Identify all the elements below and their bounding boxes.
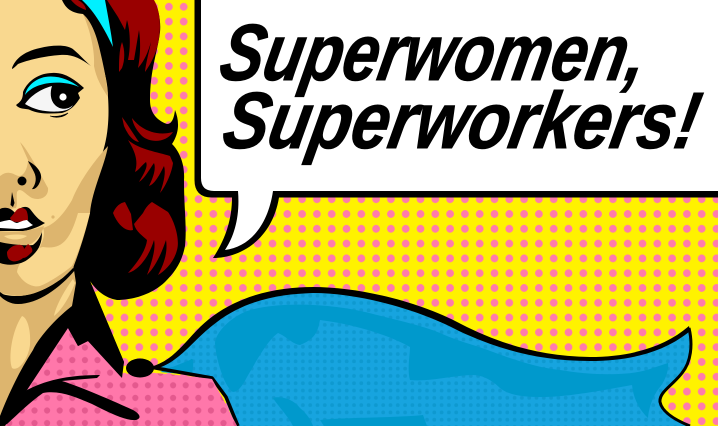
mouth: [0, 207, 45, 265]
collar point: [68, 281, 124, 378]
neck highlights: [10, 279, 75, 369]
beauty mark: [51, 215, 55, 219]
cape knot: [126, 358, 154, 378]
hair and body silhouette: [0, 0, 186, 426]
cape outline: [150, 287, 691, 426]
neck: [0, 270, 76, 416]
nose shadow: [0, 142, 48, 210]
nostril: [10, 161, 41, 207]
eyelid: cyan shadow: [25, 77, 79, 95]
eyebrow: [12, 46, 91, 69]
speech bubble: [194, 0, 718, 258]
eye outline: [16, 73, 84, 114]
face highlight: cheek: [17, 213, 90, 286]
woman: [0, 0, 237, 426]
lips outline: [0, 207, 45, 231]
cape shadow: lower folds: [273, 397, 427, 426]
eye white: [25, 86, 73, 112]
shirt: [5, 328, 237, 426]
headband: [82, 0, 113, 47]
upper lip: [10, 208, 28, 222]
heading: [214, 9, 708, 166]
cape: [150, 289, 691, 426]
lower lip: [0, 226, 44, 247]
face skin: [0, 0, 109, 296]
under-eye line: [50, 113, 68, 117]
hair highlights: [71, 0, 178, 275]
jaw line: [0, 268, 75, 304]
eye: [16, 73, 84, 117]
iris highlight: [59, 93, 67, 101]
teeth: [0, 220, 33, 229]
open mouth: [0, 232, 42, 265]
face shadow: cheek and jaw: [0, 146, 108, 296]
tongue: [7, 244, 32, 261]
collar fold strokes: [0, 375, 140, 426]
cape shadow: upper band: [215, 305, 668, 418]
face shadow: temple: [83, 14, 108, 97]
